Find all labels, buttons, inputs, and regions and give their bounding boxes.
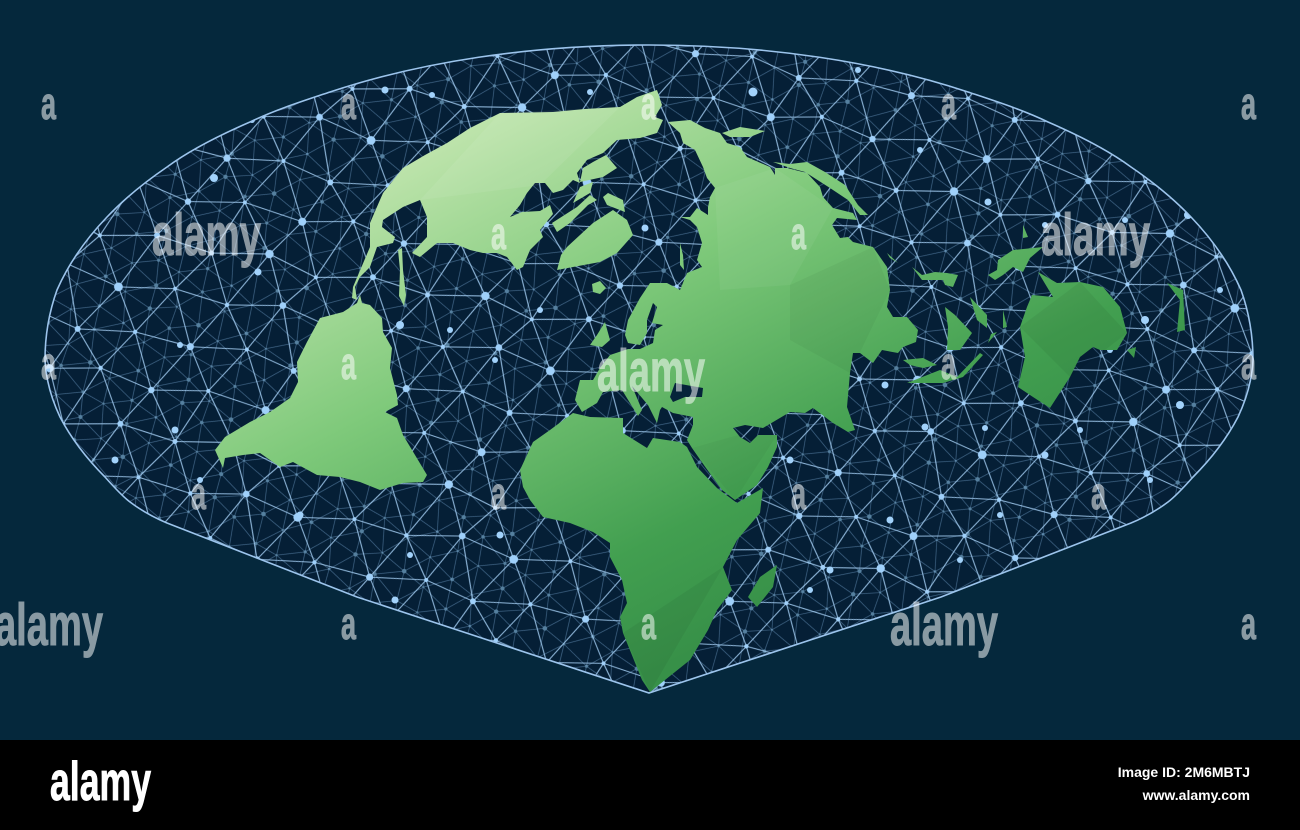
watermark word: alamy — [152, 202, 261, 268]
watermark letters: a — [41, 338, 57, 389]
continent: africa — [520, 413, 763, 692]
watermark letters — [41, 78, 1257, 649]
watermark letters: a — [341, 338, 357, 389]
watermark letters: a — [1091, 468, 1107, 519]
watermark letters: a — [41, 78, 57, 129]
islands: southeast asia — [903, 225, 1136, 383]
watermark letters: a — [791, 208, 807, 259]
website: www.alamy.com — [1142, 787, 1250, 803]
low-poly facets — [420, 107, 1127, 692]
watermark word: alamy — [890, 592, 998, 658]
watermark letters: a — [941, 78, 957, 129]
continent: north america — [352, 90, 663, 300]
arctic islands — [552, 155, 625, 294]
watermark letters: a — [491, 468, 507, 519]
watermark letters: a — [1241, 78, 1257, 129]
watermark letters: a — [791, 468, 807, 519]
watermark word: alamy — [1041, 202, 1150, 268]
continents — [215, 90, 1185, 692]
continent: australia — [1018, 272, 1127, 408]
watermark letters: a — [1241, 598, 1257, 649]
island: white sea sliver — [680, 243, 684, 270]
island: sakhalin chain — [887, 253, 898, 263]
network map: projection outline with mesh — [44, 44, 1254, 694]
island: greenland — [557, 210, 633, 270]
continent: south america — [215, 295, 427, 490]
island: novaya strip — [722, 127, 765, 137]
watermark word: alamy — [0, 592, 103, 658]
watermarks — [0, 78, 1257, 658]
watermark letters: a — [341, 78, 357, 129]
continent: eurasia — [575, 120, 918, 500]
footer logo: alamy — [50, 750, 151, 812]
watermark word: alamy — [597, 338, 705, 404]
image id: Image ID: 2M6MBTJ — [1118, 764, 1250, 780]
island: madagascar — [748, 565, 777, 607]
watermark letters: a — [191, 468, 207, 519]
watermark letters: a — [341, 598, 357, 649]
island: great britain — [590, 322, 610, 347]
island: new guinea — [988, 247, 1043, 280]
island: eastern arc — [773, 162, 868, 215]
watermark letters: a — [1241, 338, 1257, 389]
watermark letters: a — [641, 598, 657, 649]
watermark letters: a — [491, 208, 507, 259]
footer bar — [0, 740, 1300, 830]
watermark letters: a — [941, 338, 957, 389]
inland sea: black sea — [670, 383, 703, 402]
continent: central america strip — [398, 248, 406, 306]
watermark letters: a — [641, 78, 657, 129]
island: new zealand — [1167, 283, 1185, 332]
